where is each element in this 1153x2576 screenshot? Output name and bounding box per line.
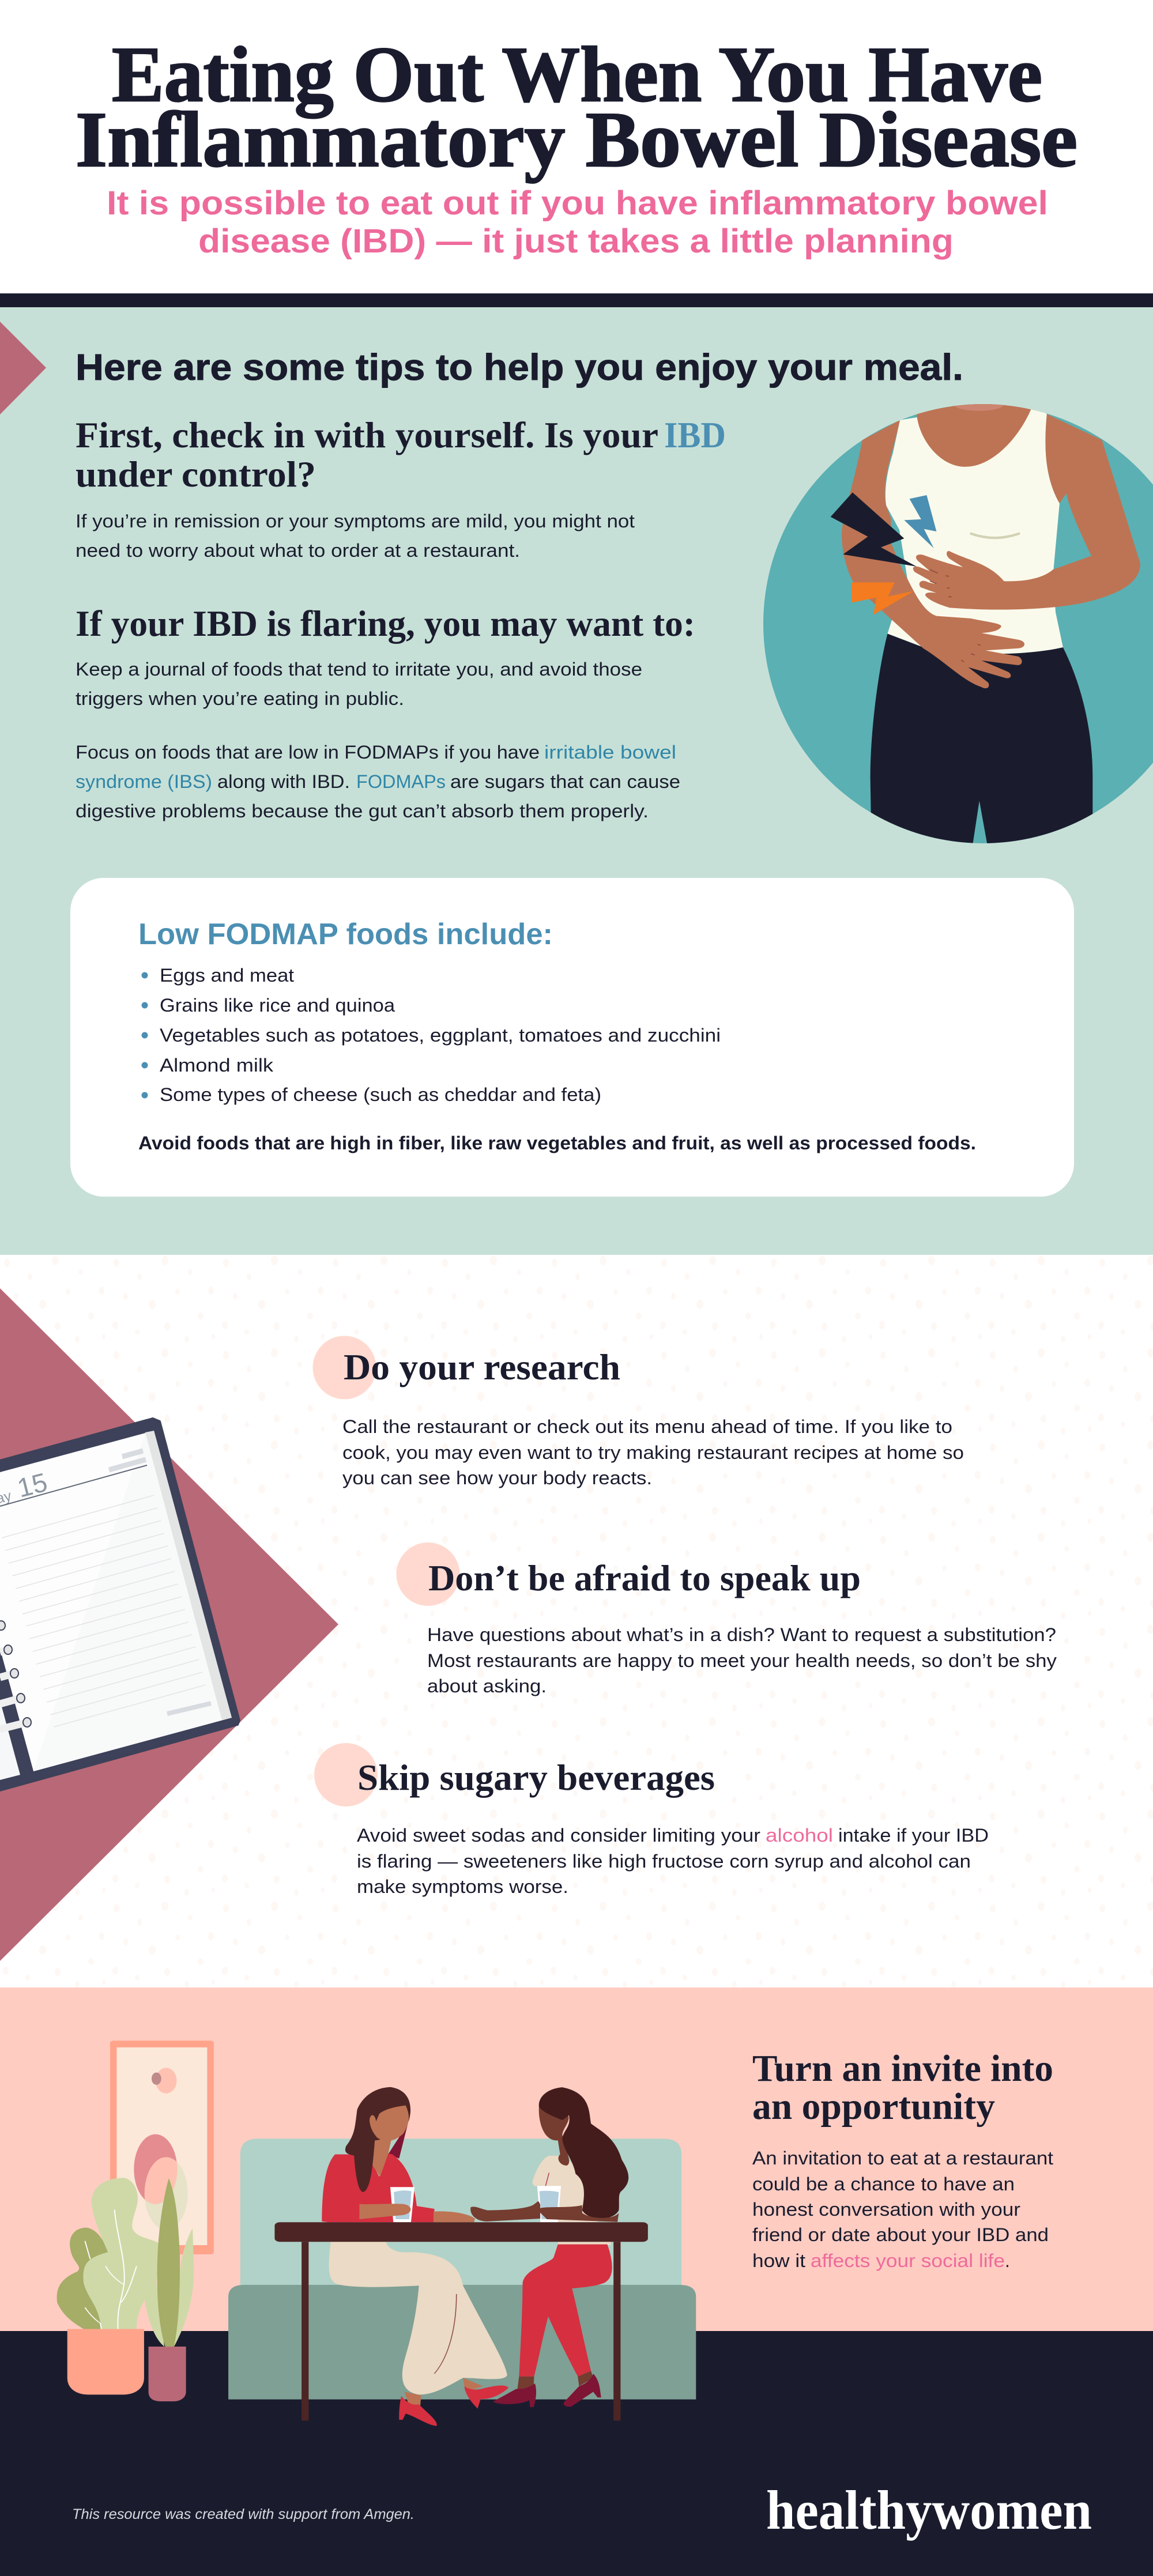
pain bolt orange	[851, 582, 914, 615]
plants	[57, 2178, 194, 2401]
tip: speak up	[397, 1542, 1057, 1696]
pain bolt blue	[904, 495, 936, 548]
panel: restaurant advice	[0, 1255, 1153, 1987]
panel: footer	[0, 2331, 1153, 2576]
belly line	[971, 534, 1019, 538]
subtitle	[107, 184, 1048, 260]
credit: This resource was created with support from Amgen.	[72, 2506, 415, 2522]
notebook rings	[0, 1621, 31, 1729]
tips heading: Here are some tips to help you enjoy your meal.	[76, 346, 963, 388]
heading: if flaring: If your IBD is flaring, you may want to:	[76, 603, 695, 644]
avoid note: Avoid foods that are high in fiber, like raw vegetables and fruit, as well as processed foods.	[138, 1133, 976, 1153]
panel: tips	[0, 307, 1153, 1255]
text: FODMAPs: Focus on foods that are low in FODMAPs if you have	[76, 742, 540, 763]
heading: check in with yourself: under control?	[76, 454, 316, 495]
upper arm and hand	[913, 414, 1140, 610]
food list: Grains like rice and quinoa	[160, 995, 395, 1016]
tip: do your research: cook, you may even want to try making restaurant recipes at home so	[342, 1442, 964, 1463]
tip: skip sugary beverages: alcohol	[766, 1825, 833, 1846]
tip: do your research	[312, 1336, 964, 1488]
tip: skip sugary beverages: make symptoms worse.	[357, 1876, 568, 1897]
heading: check in with yourself: First, check in with yourself. Is your	[76, 414, 658, 455]
notebook date	[0, 1467, 50, 1509]
sofa	[228, 2139, 696, 2400]
tip: speak up: about asking.	[427, 1676, 547, 1696]
illustration: woman holding stomach	[763, 393, 1153, 857]
tip: do your research: Call the restaurant or check out its menu ahead of time. If you like to	[342, 1416, 952, 1437]
panel: invite	[0, 1987, 1153, 2331]
arrow: rose triangle	[0, 322, 46, 414]
glass left	[390, 2187, 415, 2222]
header divider bar	[0, 293, 1153, 307]
text: journal: Keep a journal of foods that tend to irritate you, and avoid those	[76, 659, 642, 680]
notebook ruled lines	[2, 1495, 206, 1727]
lower arm	[842, 420, 1024, 688]
text: FODMAPs: digestive problems because the gut can’t absorb them properly.	[76, 801, 649, 821]
title: Inflammatory Bowel Disease	[76, 96, 1077, 183]
text: FODMAPs: FODMAPs	[356, 771, 446, 792]
wall art	[110, 2041, 214, 2254]
invite heading: Turn an invite into	[752, 2047, 1053, 2090]
invite text: friend or date about your IBD and	[752, 2224, 1049, 2245]
tip: do your research: Do your research	[344, 1347, 620, 1387]
tip: speak up: Most restaurants are happy to meet your health needs, so don’t be shy	[427, 1650, 1057, 1671]
trousers	[871, 633, 1092, 857]
text: remission: If you’re in remission or your symptoms are mild, you might not	[76, 511, 635, 531]
text: FODMAPs: irritable bowel	[544, 742, 676, 763]
tip: skip sugary beverages: is flaring — sweeteners like high fructose corn syrup and alcohol can	[357, 1851, 971, 1872]
text: FODMAPs	[76, 742, 680, 821]
text: remission: need to worry about what to order at a restaurant.	[76, 540, 520, 561]
icon: notebook	[0, 1419, 239, 1790]
invite text: affects your social life	[811, 2250, 1005, 2271]
table	[274, 2222, 648, 2420]
glass right	[537, 2186, 561, 2222]
rose triangle	[0, 1288, 338, 1961]
tip: skip sugary beverages	[314, 1743, 989, 1897]
woman left	[322, 2087, 508, 2426]
food list: Eggs and meat	[160, 965, 294, 986]
title: Eating Out When You Have	[112, 31, 1042, 118]
pain bolt navy	[831, 492, 917, 567]
invite heading: an opportunity	[752, 2085, 995, 2128]
heading: check in with yourself: IBD	[664, 414, 726, 455]
text: remission	[76, 511, 635, 561]
tank top	[886, 399, 1063, 654]
food list	[142, 965, 721, 1105]
notebook spine	[0, 1657, 33, 1775]
text: journal: triggers when you’re eating in public.	[76, 688, 404, 709]
text: journal	[76, 659, 642, 709]
heading: check in with yourself	[76, 414, 726, 495]
notebook tabs	[109, 1451, 211, 1714]
text: FODMAPs: syndrome (IBS)	[76, 771, 212, 792]
food list: Some types of cheese (such as cheddar and feta)	[160, 1084, 601, 1105]
invite text: how it	[752, 2250, 805, 2271]
tip: skip sugary beverages: Skip sugary beverages	[357, 1757, 715, 1798]
tip: skip sugary beverages: Avoid sweet sodas and consider limiting your	[357, 1825, 760, 1846]
food list: Almond milk	[160, 1055, 274, 1076]
invite text: .	[1005, 2250, 1010, 2271]
notebook date: 15	[14, 1467, 50, 1503]
invite text: An invitation to eat at a restaurant	[752, 2148, 1053, 2168]
text: FODMAPs: along with IBD.	[217, 771, 350, 792]
panel: header	[0, 0, 1153, 293]
knuckles	[930, 569, 981, 662]
tip: speak up: Don’t be afraid to speak up	[428, 1557, 861, 1598]
woman right	[470, 2087, 628, 2407]
invite text	[752, 2148, 1053, 2271]
subtitle: It is possible to eat out if you have inflammatory bowel	[107, 184, 1048, 222]
food list: Vegetables such as potatoes, eggplant, tomatoes and zucchini	[160, 1025, 721, 1046]
logo: healthywomen: healthywomen	[766, 2479, 1092, 2541]
tip: do your research: you can see how your body reacts.	[342, 1468, 652, 1488]
invite heading	[752, 2047, 1053, 2128]
FODMAP heading: Low FODMAP foods include:	[138, 918, 553, 951]
tip: speak up: Have questions about what’s in a dish? Want to request a substitution?	[427, 1624, 1056, 1645]
illustration: two women at a table	[57, 2041, 696, 2426]
panel: low FODMAP foods	[70, 878, 1074, 1197]
title	[76, 31, 1077, 183]
subtitle: disease (IBD) — it just takes a little planning	[198, 222, 954, 260]
tip: skip sugary beverages: intake if your IBD	[838, 1825, 989, 1846]
invite text: honest conversation with your	[752, 2199, 1020, 2220]
neckline skin	[917, 404, 1031, 467]
text: FODMAPs: are sugars that can cause	[450, 771, 680, 792]
invite text: could be a chance to have an	[752, 2174, 1015, 2194]
